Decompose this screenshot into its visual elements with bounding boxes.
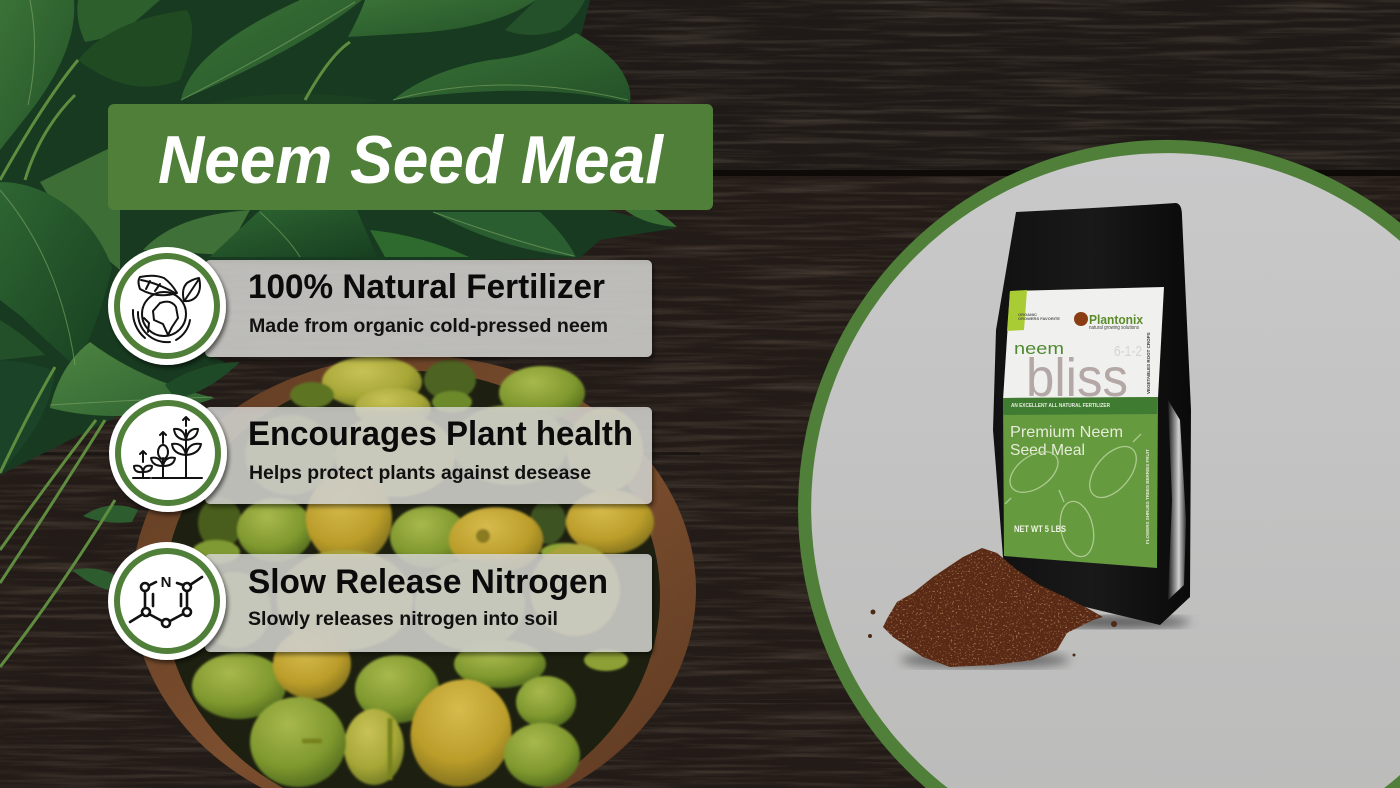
- label text: VEGETABLES ROOT CROPS: [1146, 332, 1151, 394]
- heading: Slow Release Nitrogen: [248, 563, 608, 601]
- wooden bowl of neem fruit: [132, 355, 696, 788]
- label text: Premium Neem: [1010, 424, 1123, 441]
- brand logo: [1074, 312, 1144, 331]
- front label: white area: [1003, 287, 1164, 400]
- icon: nitrogen molecule: [108, 542, 226, 660]
- label text: AN EXCELLENT ALL NATURAL FERTILIZER: [1011, 403, 1110, 409]
- label text: FLOWERS SHRUBS TREES BERRIES FRUIT: [1145, 449, 1150, 544]
- neem meal powder pile: [868, 548, 1117, 668]
- neem fruit outlines on label: [1003, 434, 1145, 560]
- brand logo: Plantonix: [1089, 312, 1144, 327]
- feature: encourages plant health: [109, 394, 652, 512]
- icon: earth with leaves: [108, 247, 226, 365]
- product: neem bliss bag: [993, 203, 1191, 628]
- title banner: [108, 104, 713, 210]
- product circle with green ring: [798, 140, 1400, 788]
- bag side foil: [1168, 400, 1186, 600]
- feature: 100% natural fertilizer: [108, 247, 652, 365]
- subtext: Helps protect plants against desease: [249, 463, 591, 484]
- subtext: Made from organic cold-pressed neem: [249, 316, 608, 337]
- icon: nitrogen molecule: N: [161, 574, 171, 591]
- label text: NET WT 5 LBS: [1014, 524, 1066, 534]
- subtext: Slowly releases nitrogen into soil: [248, 609, 558, 630]
- title text: Neem Seed Meal: [158, 122, 665, 198]
- bag shadow: [1040, 616, 1190, 628]
- bag body: [993, 203, 1191, 625]
- heading: Encourages Plant health: [248, 415, 633, 453]
- label text: GROWERS FAVORITE: [1018, 316, 1060, 321]
- label text: Seed Meal: [1010, 442, 1085, 459]
- brand logo: natural growing solutions: [1089, 325, 1139, 331]
- neem leaves and branches: [0, 0, 677, 667]
- label text: neem: [1014, 339, 1064, 358]
- feature: slow release nitrogen: [108, 542, 652, 660]
- heading: 100% Natural Fertilizer: [248, 268, 605, 306]
- label text: ORGANIC: [1018, 312, 1037, 317]
- label text: bliss: [1026, 348, 1128, 408]
- label text: 6-1-2: [1114, 343, 1142, 360]
- label text: [1010, 312, 1151, 544]
- front label: green area: [1003, 397, 1158, 568]
- icon: growing plants: [109, 394, 227, 512]
